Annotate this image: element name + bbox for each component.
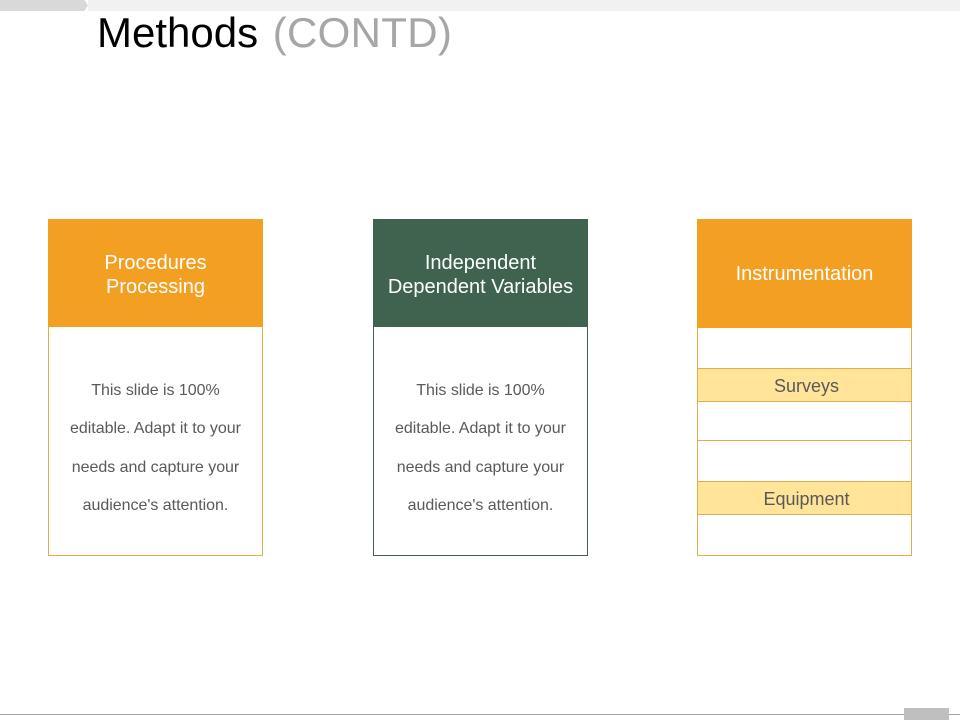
heading: independent dependent variables: Dependent Variables [388,276,573,298]
text block: procedures description: This slide is 100% [91,382,220,399]
footer tab [904,708,949,720]
text block: variables description: This slide is 100% [416,382,545,399]
text block: variables description: needs and capture your [397,459,564,476]
heading: instrumentation [697,219,912,328]
row: surveys [697,368,912,402]
panel: independent dependent variables [373,219,588,556]
heading: procedures processing [48,219,263,327]
heading: independent dependent variables [373,219,588,327]
heading: instrumentation: Instrumentation [736,263,873,285]
text block: variables description: editable. Adapt it to your [395,420,566,437]
heading: procedures processing: Processing [106,276,205,298]
text block: procedures description [70,382,241,514]
text block: variables description [395,382,566,514]
footer line [0,714,960,715]
title: Methods (CONTD) [97,9,452,56]
row: surveys: Surveys [774,376,839,396]
text block: procedures description: editable. Adapt it to your [70,420,241,437]
top bar: progress tab [0,0,88,11]
heading: independent dependent variables: Independent [425,252,536,274]
top bar: light track [88,0,960,11]
row: equipment: Equipment [763,489,850,509]
text block: variables description: audience's attention. [408,497,553,514]
text block: procedures description: audience's attention. [83,497,228,514]
row: equipment [697,481,912,515]
text block: procedures description: needs and capture your [72,459,239,476]
panel: procedures processing [48,219,263,556]
panel: instrumentation [697,219,912,556]
heading: procedures processing: Procedures [104,252,207,274]
